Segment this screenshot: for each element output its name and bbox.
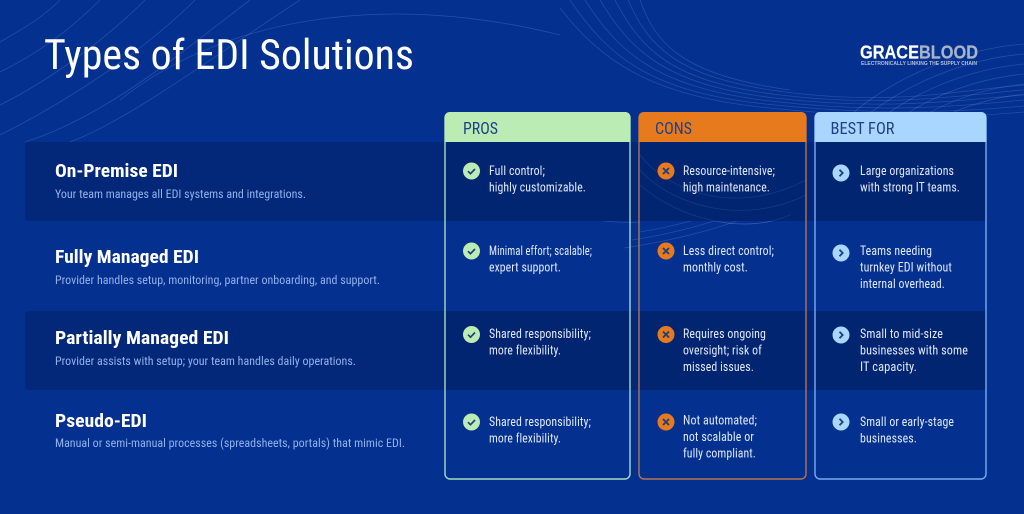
pros: Pseudo-EDI: Shared responsibility; bbox=[489, 415, 591, 430]
best for: Fully Managed: Teams needing bbox=[860, 244, 932, 259]
best for: Partially Managed: IT capacity. bbox=[860, 360, 917, 375]
column highlights over dark bands bbox=[445, 142, 986, 390]
row band: On-Premise EDI bbox=[25, 142, 986, 221]
cons: Fully Managed bbox=[658, 242, 774, 276]
row: On-Premise EDI bbox=[55, 160, 306, 202]
column: Cons bbox=[638, 112, 806, 479]
pros: Fully Managed: Minimal effort; scalable; bbox=[489, 244, 592, 259]
cons: Partially Managed: Requires ongoing bbox=[683, 327, 766, 342]
header: Cons bbox=[638, 112, 806, 142]
header: Cons: CONS bbox=[655, 119, 692, 139]
pros: Pseudo-EDI: more flexibility. bbox=[489, 432, 561, 446]
header: Pros: PROS bbox=[463, 119, 498, 139]
pros: Fully Managed: expert support. bbox=[489, 260, 561, 276]
best for: On-Premise: Large organizations bbox=[860, 164, 954, 179]
row: On-Premise EDI: Your team manages all EDI systems and integrations. bbox=[55, 188, 306, 202]
cons: Pseudo-EDI bbox=[658, 414, 757, 462]
pros: Fully Managed bbox=[463, 242, 592, 276]
cons: On-Premise bbox=[658, 162, 775, 196]
best for: Partially Managed: Small to mid-size bbox=[860, 327, 943, 342]
pros: On-Premise: highly customizable. bbox=[489, 180, 586, 196]
best for: Fully Managed: turnkey EDI without bbox=[860, 260, 952, 276]
row: On-Premise EDI: On-Premise EDI bbox=[55, 160, 178, 182]
row: Partially Managed EDI bbox=[55, 327, 356, 369]
row: Pseudo-EDI: Manual or semi-manual processes (spreadsheets, portals) that mimic EDI. bbox=[55, 436, 405, 451]
column: Pros bbox=[444, 112, 630, 479]
header: Pros bbox=[444, 112, 630, 142]
row: Fully Managed EDI bbox=[55, 246, 380, 288]
cons: On-Premise: high maintenance. bbox=[683, 180, 770, 196]
best for: Fully Managed: internal overhead. bbox=[860, 277, 945, 292]
row: Fully Managed EDI: Provider handles setup, monitoring, partner onboarding, and support. bbox=[55, 274, 380, 288]
best for: Fully Managed bbox=[832, 244, 952, 292]
row band: Partially Managed EDI bbox=[25, 311, 986, 390]
cons: Fully Managed: monthly cost. bbox=[683, 260, 748, 276]
row: Fully Managed EDI: Fully Managed EDI bbox=[55, 246, 199, 268]
cons: Partially Managed: missed issues. bbox=[683, 360, 754, 375]
title: Types of EDI Solutions bbox=[44, 31, 414, 80]
best for: Partially Managed bbox=[832, 326, 968, 375]
row: Partially Managed EDI: Provider assists with setup; your team handles daily operations. bbox=[55, 355, 356, 369]
cons: Pseudo-EDI: Not automated; bbox=[683, 414, 757, 428]
best for: Pseudo-EDI: businesses. bbox=[860, 432, 917, 446]
cons: Pseudo-EDI: not scalable or bbox=[683, 430, 754, 445]
header: Best For bbox=[814, 112, 986, 142]
cons: Fully Managed: Less direct control; bbox=[683, 244, 774, 259]
row: Pseudo-EDI bbox=[55, 410, 405, 451]
row: Pseudo-EDI: Pseudo-EDI bbox=[55, 410, 147, 432]
logo: Graceblood: ELECTRONICALLY LINKING THE SUPPLY CHAIN bbox=[861, 61, 977, 67]
column: Best For bbox=[814, 112, 986, 479]
best for: Pseudo-EDI: Small or early-stage bbox=[860, 415, 954, 430]
row: Partially Managed EDI: Partially Managed EDI bbox=[55, 327, 229, 349]
pros: Partially Managed: Shared responsibility; bbox=[489, 327, 591, 342]
header: Best For: BEST FOR bbox=[830, 119, 894, 139]
pros: Partially Managed: more flexibility. bbox=[489, 344, 561, 358]
cons: Partially Managed bbox=[658, 326, 766, 375]
pros: On-Premise bbox=[463, 162, 586, 196]
cons: Pseudo-EDI: fully compliant. bbox=[683, 446, 756, 462]
best for: On-Premise: with strong IT teams. bbox=[860, 180, 960, 196]
best for: Partially Managed: businesses with some bbox=[860, 344, 968, 358]
pros: Pseudo-EDI bbox=[463, 414, 591, 446]
cons: Partially Managed: oversight; risk of bbox=[683, 344, 762, 358]
logo: Graceblood: GRACEBLOOD bbox=[860, 42, 978, 62]
pros: On-Premise: Full control; bbox=[489, 164, 545, 179]
best for: On-Premise bbox=[832, 164, 960, 196]
pros: Partially Managed bbox=[463, 326, 591, 358]
best for: Pseudo-EDI bbox=[832, 414, 954, 446]
cons: On-Premise: Resource-intensive; bbox=[683, 164, 775, 179]
